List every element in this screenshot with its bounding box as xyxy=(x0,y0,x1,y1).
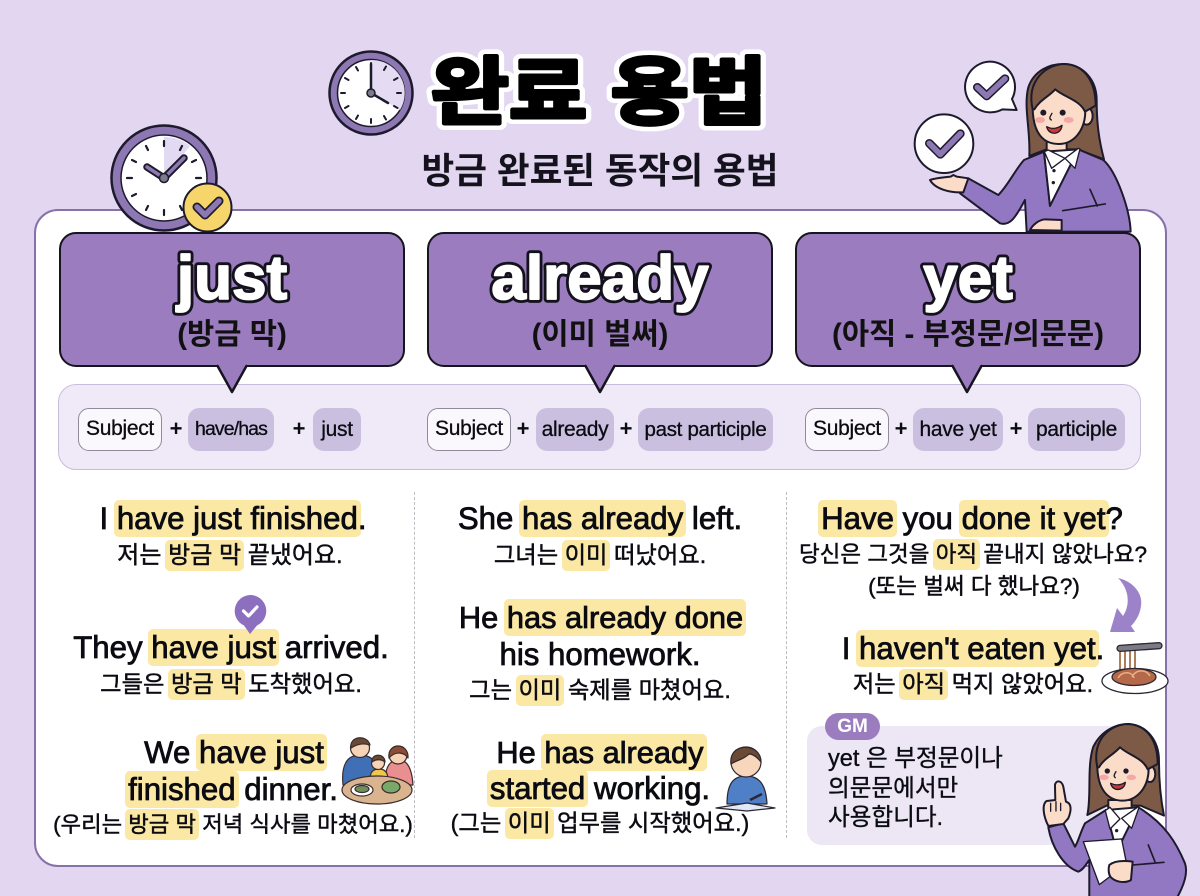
translation: 그녀는 떠났어요. xyxy=(494,542,706,568)
plus: + xyxy=(293,416,305,441)
subtitle: 방금 완료된 동작의 용법 xyxy=(422,151,778,191)
translation: 그들은 도착했어요. xyxy=(100,671,362,697)
translation: (또는 벌써 다 했나요?) xyxy=(868,574,1080,599)
header: already xyxy=(427,232,773,367)
plus: + xyxy=(620,416,632,441)
sentence: his homework. xyxy=(499,637,701,672)
note text: yet 은 부정문이나 xyxy=(828,746,1003,772)
meaning: already: (이미 벌써) xyxy=(532,318,668,351)
sentence: have just xyxy=(151,630,276,665)
formula band xyxy=(58,384,1141,470)
title: 완료 용법: 완료 용법 xyxy=(431,51,767,134)
word: just: just xyxy=(176,244,287,313)
translation: 저는 끝냈어요. xyxy=(117,542,343,569)
sentence: haven't eaten yet xyxy=(859,631,1096,666)
icon: family dinner xyxy=(342,738,413,804)
sentence: done it yet xyxy=(962,501,1106,536)
sentence xyxy=(487,770,710,807)
translation: 저는 먹지 않았어요. xyxy=(853,671,1093,697)
panel: main white card xyxy=(34,209,1167,867)
chip: Subject xyxy=(86,417,154,440)
word: already: already xyxy=(491,244,709,313)
sentence: working. xyxy=(594,771,710,806)
formula: just xyxy=(78,408,361,451)
examples: just xyxy=(53,500,413,840)
chip: participle xyxy=(1036,418,1117,441)
translation: (그는 업무를 시작했어요.) xyxy=(451,810,749,836)
sentence xyxy=(818,500,1123,537)
sentence: Have xyxy=(821,501,894,536)
chip xyxy=(805,408,889,451)
sentence: He xyxy=(496,735,536,770)
chip: just xyxy=(321,418,353,441)
translation: 그는 숙제를 마쳤어요. xyxy=(469,677,731,703)
icon: check pin xyxy=(235,595,266,634)
note badge xyxy=(825,713,880,740)
sentence: has already xyxy=(544,735,704,770)
sentence: We xyxy=(144,735,190,770)
title: 완료 용법: 완료 용법 xyxy=(431,51,767,134)
plus: + xyxy=(517,416,529,441)
translation: (우리는 저녁 식사를 마쳤어요.) xyxy=(53,812,413,837)
chip: have yet xyxy=(920,418,996,441)
translation: 이미 xyxy=(508,810,551,836)
chip xyxy=(638,408,773,451)
sentence xyxy=(144,734,327,771)
sentence xyxy=(125,771,338,808)
chip xyxy=(78,408,162,451)
word: just: just xyxy=(176,244,287,313)
word: yet: yet xyxy=(923,244,1013,313)
header: just xyxy=(59,232,405,367)
chip xyxy=(1028,408,1125,451)
chip xyxy=(536,408,614,451)
plus: + xyxy=(1010,416,1022,441)
note text: 사용합니다. xyxy=(828,805,943,831)
translation: 아직 xyxy=(902,671,945,697)
icon: noodles xyxy=(1102,642,1168,694)
sentence: She left. xyxy=(458,501,742,536)
sentence: you ? xyxy=(903,501,1123,536)
note text xyxy=(828,746,1003,831)
sentence: They arrived. xyxy=(73,630,389,665)
chip: have/has xyxy=(195,418,267,440)
sentence: dinner. xyxy=(244,772,338,807)
header: yet xyxy=(795,232,1141,367)
chip: Subject xyxy=(435,417,503,440)
translation: 당신은 그것을 끝내지 않았나요? xyxy=(799,542,1147,567)
plus: + xyxy=(170,416,182,441)
note badge: GM xyxy=(837,716,868,737)
translation: 이미 xyxy=(565,542,607,568)
chip xyxy=(913,408,1003,451)
translation: 방금 막 xyxy=(168,542,241,569)
icon: boy writing xyxy=(716,747,775,811)
word: yet: yet xyxy=(923,244,1013,313)
icon: curved arrow xyxy=(1110,578,1141,632)
chip: past participle xyxy=(644,418,766,441)
note box xyxy=(807,726,1137,845)
plus: + xyxy=(895,416,907,441)
chip xyxy=(313,408,361,451)
sentence: have just xyxy=(199,735,324,770)
chip xyxy=(427,408,511,451)
sentence: I . xyxy=(842,631,1104,666)
examples: yet xyxy=(799,500,1147,700)
meaning: just: (방금 막) xyxy=(177,318,287,351)
sentence: He xyxy=(459,600,498,635)
sentence: have just finished xyxy=(117,501,358,536)
translation: 방금 막 xyxy=(171,671,242,697)
word: already: already xyxy=(491,244,709,313)
meaning: yet: (아직 - 부정문/의문문) xyxy=(832,318,1104,351)
note text: 의문문에서만 xyxy=(828,776,958,802)
sentence: finished xyxy=(128,772,236,807)
sentence: I . xyxy=(99,501,366,536)
formula: yet xyxy=(805,408,1125,451)
translation: 방금 막 xyxy=(128,812,196,837)
translation: 아직 xyxy=(936,542,977,567)
chip xyxy=(188,408,274,451)
translation: 이미 xyxy=(518,677,561,703)
sentence: started xyxy=(490,771,585,806)
formula: already xyxy=(427,408,773,451)
chip: already xyxy=(542,418,608,441)
sentence: has already done xyxy=(507,600,743,635)
examples: already xyxy=(451,500,749,839)
chip: Subject xyxy=(813,417,881,440)
sentence: has already xyxy=(522,501,683,536)
